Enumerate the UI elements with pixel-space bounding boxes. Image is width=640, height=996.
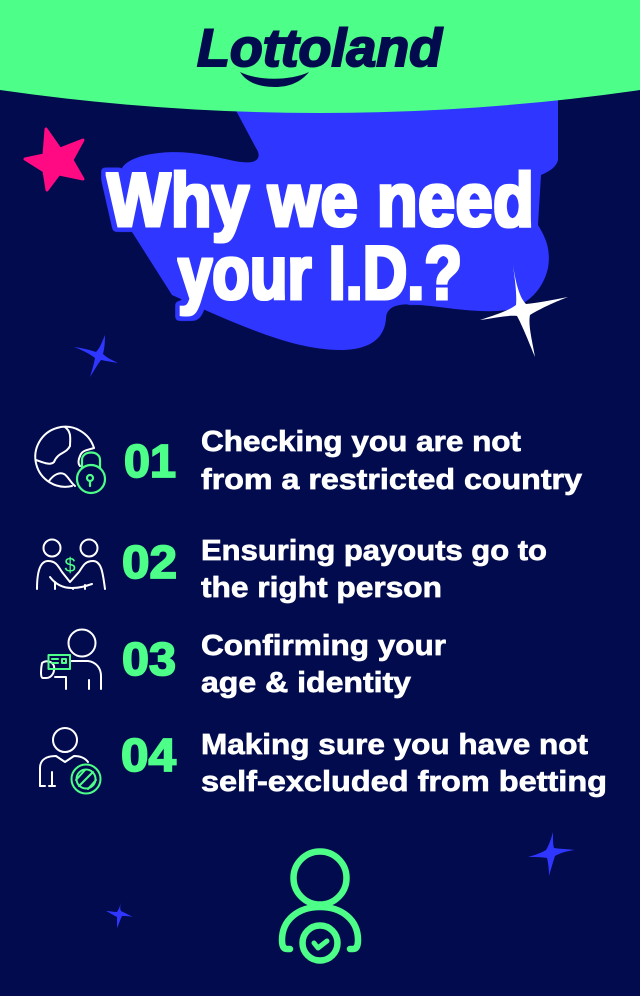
text: item 3: Confirming your	[201, 630, 446, 662]
number 01: 01	[124, 435, 176, 487]
icon: blue sparkle bottom right	[528, 832, 575, 876]
icon: person with check badge	[282, 852, 358, 960]
logo: Lottoland	[197, 19, 444, 78]
text: item 3	[201, 630, 446, 699]
green header band	[0, 0, 640, 113]
icon: handshake with dollar: $	[64, 555, 76, 577]
title: your I.D.?	[178, 231, 462, 316]
icon: person holding ID card	[41, 630, 101, 689]
text: item 2: the right person	[201, 572, 442, 604]
text: item 1	[201, 426, 582, 496]
blue blob behind title	[122, 100, 558, 350]
title: Why we need	[107, 158, 534, 243]
number 02: 02	[122, 536, 177, 588]
item 1	[35, 426, 582, 496]
icon: person with prohibition sign	[40, 728, 100, 794]
text: item 2: Ensuring payouts go to	[201, 535, 547, 567]
icon: white sparkle	[480, 265, 568, 357]
text: item 1: Checking you are not	[201, 426, 521, 458]
icon: handshake with dollar	[37, 540, 105, 589]
title	[107, 158, 534, 316]
text: item 3: age & identity	[201, 667, 411, 699]
text: item 4: Making sure you have not	[201, 729, 588, 761]
number 04: 04	[121, 729, 176, 781]
text: item 4: self-excluded from betting	[201, 766, 607, 798]
icon: blue sparkle bottom left	[106, 902, 133, 928]
item 3	[41, 630, 446, 699]
number 03: 03	[122, 633, 176, 685]
icon: blue sparkle left	[74, 335, 118, 377]
text: item 2	[201, 535, 547, 604]
icon: globe with padlock	[35, 427, 105, 493]
item 4	[40, 728, 607, 798]
icon: pink star	[25, 129, 83, 190]
text: item 1: from a restricted country	[201, 464, 582, 496]
text: item 4	[201, 729, 607, 798]
item 2	[37, 535, 547, 604]
